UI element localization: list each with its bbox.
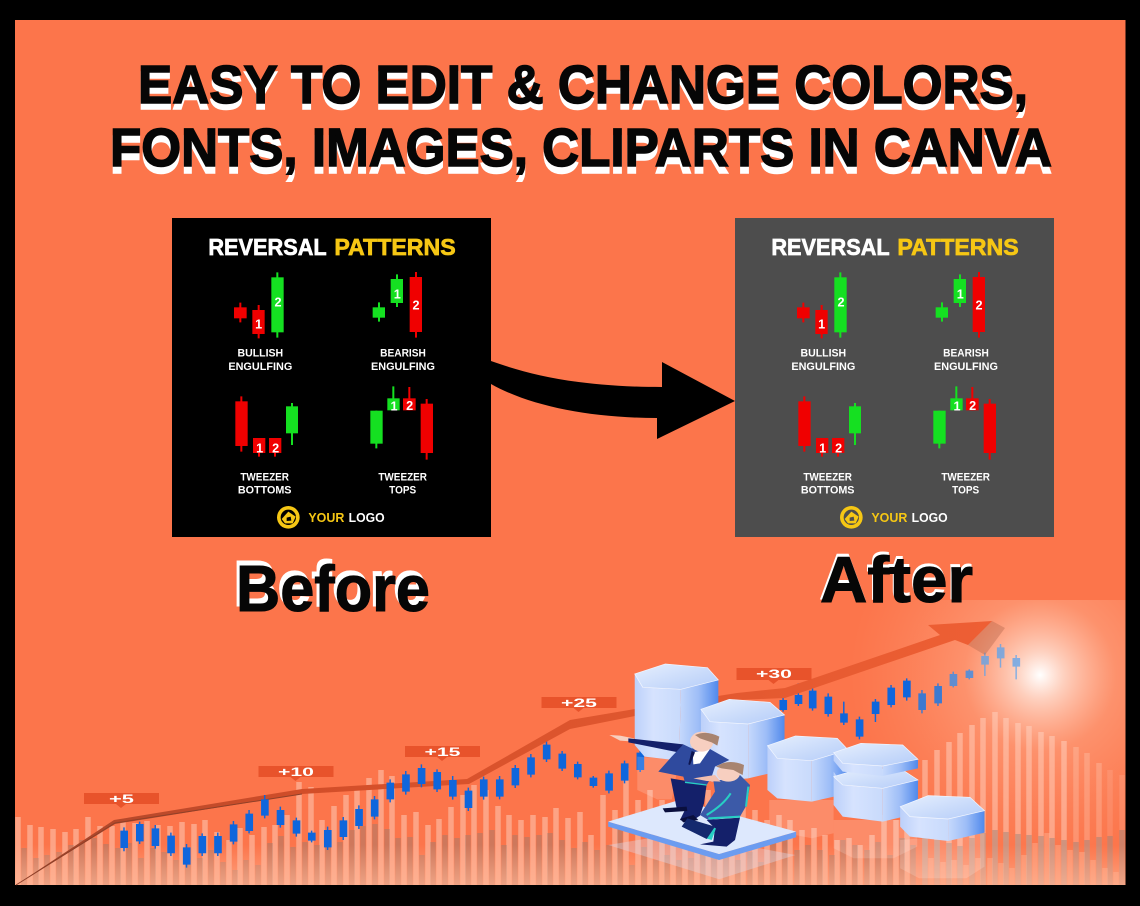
candlesticks cut by the trend band (527, 740, 550, 777)
title shadow: FONTS, IMAGES, CLIPARTS IN CANVA (110, 125, 1052, 185)
pattern: bearish engulfing: 1 (957, 288, 964, 302)
hexagon 3 (767, 736, 848, 802)
panel: before card (172, 218, 491, 537)
arrow from before to after (491, 361, 735, 439)
title shadow: EASY TO EDIT & CHANGE COLORS, (138, 61, 1028, 121)
pattern: tweezer tops: 1 (390, 400, 398, 414)
pattern: bearish engulfing: ENGULFING (934, 361, 998, 373)
pattern: bullish engulfing: ENGULFING (791, 361, 855, 373)
pattern: bearish engulfing: 2 (975, 299, 983, 313)
title text: EASY TO EDIT & CHANGE COLORS, (138, 55, 1028, 115)
pattern: tweezer tops: TWEEZER (941, 471, 990, 483)
pattern: bullish engulfing (228, 272, 292, 373)
hexagon 6 (900, 796, 985, 841)
logo: YOUR (308, 511, 344, 525)
pattern: bullish engulfing: BULLISH (237, 348, 283, 360)
pattern: bullish engulfing: 1 (818, 317, 825, 331)
isometric hexagon illustration (608, 664, 985, 879)
value tag +15 (405, 746, 480, 761)
logo (840, 506, 948, 529)
pattern: tweezer tops (933, 386, 996, 496)
card heading: PATTERNS (334, 234, 456, 260)
value tag +5: +5 (109, 794, 135, 806)
pattern: bearish engulfing: BEARISH (380, 348, 426, 360)
platform reflection (608, 833, 795, 879)
pattern: tweezer tops: 1 (953, 400, 961, 414)
title shadow (110, 61, 1052, 185)
after label: After (819, 540, 972, 613)
pattern: tweezer bottoms (235, 396, 298, 496)
before label: Before (233, 547, 427, 620)
pattern: bearish engulfing: BEARISH (943, 348, 989, 360)
pattern: bullish engulfing: BULLISH (800, 348, 846, 360)
card heading: REVERSAL (771, 234, 890, 260)
pattern: tweezer tops: TOPS (389, 484, 416, 496)
after label: After (820, 543, 973, 616)
rising trend arrow (16, 621, 1005, 885)
light glow at chart end (850, 600, 1126, 885)
pattern: tweezer bottoms: BOTTOMS (801, 484, 854, 496)
title text (110, 55, 1052, 178)
pattern: bullish engulfing: ENGULFING (228, 361, 292, 373)
pattern: tweezer bottoms: 2 (835, 441, 842, 455)
pattern: tweezer bottoms: 2 (272, 441, 279, 455)
pattern: bullish engulfing: 2 (274, 296, 282, 310)
value tag +10: +10 (278, 767, 314, 779)
pattern: tweezer tops: TWEEZER (378, 471, 427, 483)
bar base highlight (15, 845, 1126, 885)
value tag +15: +15 (424, 747, 462, 759)
before label: Before (236, 552, 430, 625)
value tag +10 (258, 766, 334, 781)
card heading: PATTERNS (897, 234, 1019, 260)
pattern: tweezer bottoms: 1 (819, 441, 826, 455)
hexagon 4 (834, 743, 918, 776)
pattern: tweezer bottoms: 1 (256, 441, 263, 455)
pattern: tweezer tops: TOPS (952, 484, 979, 496)
two businessmen (609, 732, 750, 847)
pattern: bullish engulfing: 2 (837, 296, 845, 310)
hexagon reflections (637, 757, 985, 878)
pattern: tweezer tops (370, 386, 433, 496)
logo (277, 506, 385, 529)
pattern: tweezer bottoms: TWEEZER (240, 471, 289, 483)
value tag +30 (736, 668, 812, 684)
title with white drop shadow (110, 55, 1052, 185)
panel: after card (735, 218, 1054, 537)
pattern: bearish engulfing (934, 272, 998, 373)
pattern: bearish engulfing: ENGULFING (371, 361, 435, 373)
hexagon 1 (635, 664, 718, 761)
pattern: bearish engulfing: 1 (394, 288, 401, 302)
pattern: bearish engulfing: 2 (412, 299, 420, 313)
logo: YOUR (871, 511, 907, 525)
title text: FONTS, IMAGES, CLIPARTS IN CANVA (110, 118, 1052, 178)
platform (608, 800, 796, 860)
value tag +25: +25 (561, 698, 598, 710)
businessman with briefcase (682, 762, 750, 847)
hexagon 5 (834, 768, 918, 822)
blue candlesticks right of the trend (574, 644, 1020, 793)
hexagon 2 (701, 699, 785, 782)
value tag +30: +30 (756, 669, 792, 681)
pattern: tweezer bottoms: TWEEZER (803, 471, 852, 483)
businessman pointing (609, 732, 729, 822)
background volume bars (18, 712, 1122, 885)
pattern: bullish engulfing (791, 272, 855, 373)
logo: LOGO (349, 511, 385, 525)
blue candlesticks left (120, 751, 566, 868)
pattern: bearish engulfing (371, 272, 435, 373)
pattern: bullish engulfing: 1 (255, 317, 262, 331)
value tag +5 (84, 793, 159, 808)
card heading: REVERSAL (208, 234, 327, 260)
logo: LOGO (912, 511, 948, 525)
pattern: tweezer tops: 2 (406, 399, 413, 413)
value tag +25 (542, 697, 616, 712)
pattern: tweezer tops: 2 (969, 399, 976, 413)
pattern: tweezer bottoms: BOTTOMS (238, 484, 291, 496)
pattern: tweezer bottoms (798, 396, 861, 496)
